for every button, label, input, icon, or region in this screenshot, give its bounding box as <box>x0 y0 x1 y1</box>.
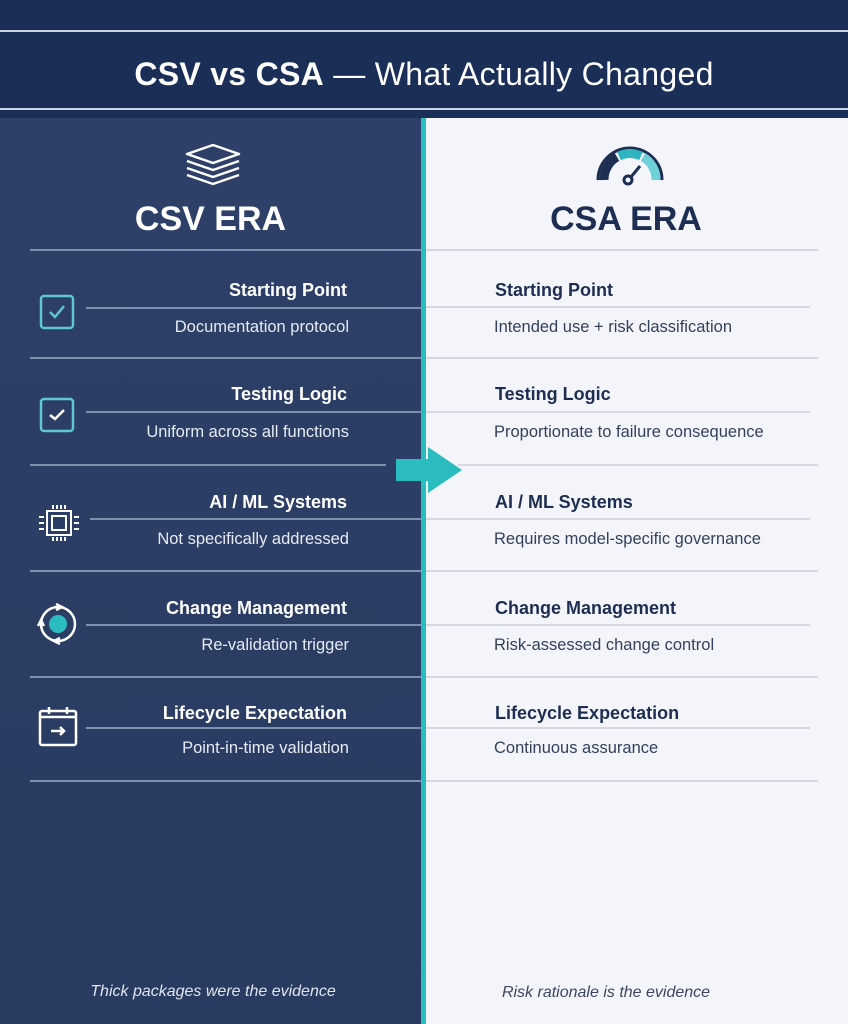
text: Lifecycle Expectation <box>163 703 347 723</box>
icon: calendar <box>38 707 78 746</box>
text: Not specifically addressed <box>157 530 349 548</box>
text: Testing Logic <box>495 384 611 404</box>
text: Change Management <box>166 598 347 618</box>
panel: CSA era <box>426 118 848 1024</box>
text: Change Management <box>495 598 676 618</box>
row: Lifecycle Expectation <box>163 703 679 757</box>
heading: CSA ERA: CSA ERA <box>550 200 702 238</box>
text: Lifecycle Expectation <box>495 703 679 723</box>
arrow <box>396 447 462 493</box>
icon: checkbox 1 <box>40 294 74 330</box>
icon: chip <box>39 505 79 541</box>
title: CSV vs CSA — What Actually Changed <box>134 56 714 92</box>
text: AI / ML Systems <box>495 492 633 512</box>
teal divider <box>421 118 426 1024</box>
row: AI / ML Systems <box>157 492 761 548</box>
row: Starting Point <box>175 280 732 336</box>
footer left: Thick packages were the evidence <box>90 983 336 1000</box>
row: Testing Logic <box>146 384 764 441</box>
header band <box>0 0 848 118</box>
text: Requires model-specific governance <box>494 530 761 548</box>
text: Uniform across all functions <box>146 423 349 441</box>
icon: stack <box>186 144 240 186</box>
icon: cycle <box>36 602 76 646</box>
text: Starting Point <box>495 280 613 300</box>
text: Point-in-time validation <box>182 739 349 757</box>
icon: checkbox 2 <box>40 398 74 432</box>
row: Change Management <box>166 598 714 654</box>
heading: CSV ERA: CSV ERA <box>135 200 286 238</box>
text: Risk-assessed change control <box>494 636 714 654</box>
footer right: Risk rationale is the evidence <box>502 984 710 1001</box>
text: AI / ML Systems <box>209 492 347 512</box>
text: Proportionate to failure consequence <box>494 423 764 441</box>
row dividers <box>30 249 818 782</box>
text: Testing Logic <box>231 384 347 404</box>
text: Continuous assurance <box>494 739 658 757</box>
panel: CSV era <box>0 118 421 1024</box>
icon: gauge <box>596 146 664 186</box>
text: Starting Point <box>229 280 347 300</box>
text: Documentation protocol <box>175 318 349 336</box>
text: Re-validation trigger <box>201 636 349 654</box>
text: Intended use + risk classification <box>494 318 732 336</box>
